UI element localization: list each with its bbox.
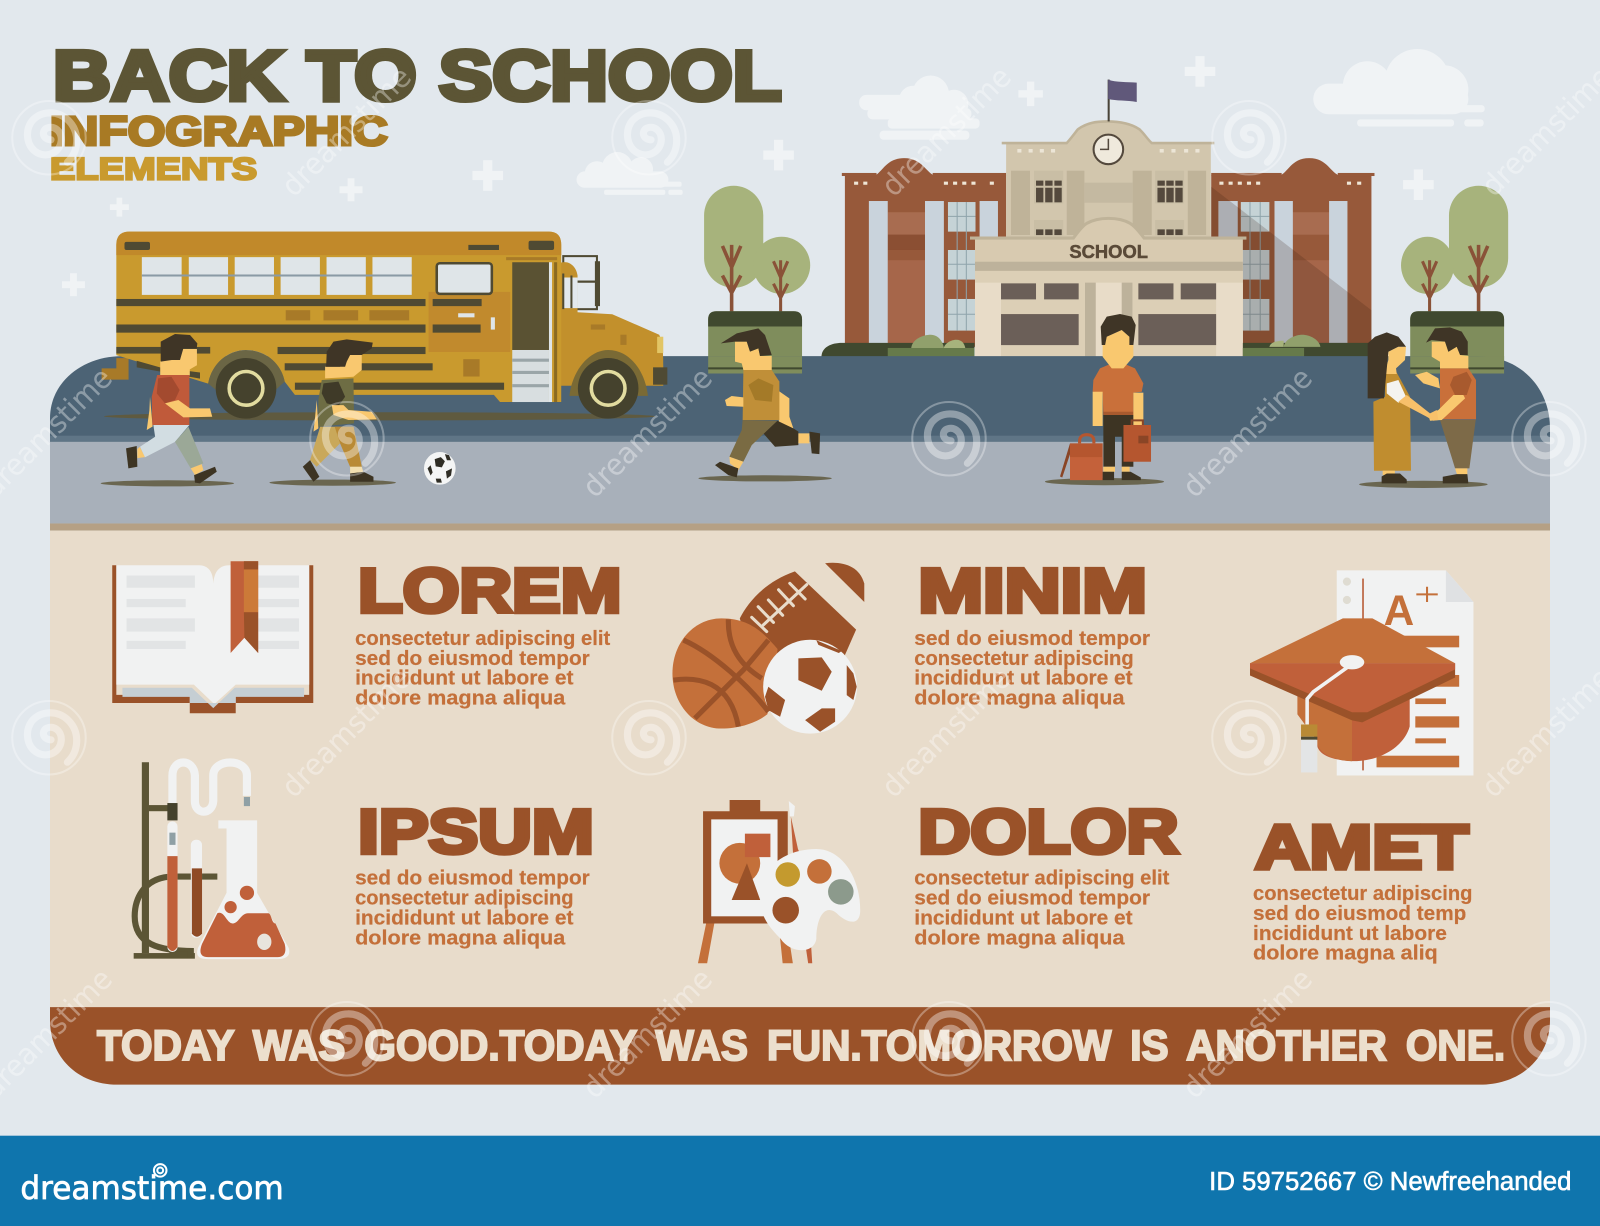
text block: minim: consectetur adipiscing: [914, 648, 1134, 670]
bookmark: [231, 561, 258, 653]
left brick wing: [842, 158, 1006, 347]
woman: [1368, 332, 1411, 483]
woman's arm: [1398, 395, 1438, 421]
watermark text: dreamstime: [875, 60, 1018, 203]
brush: [791, 816, 812, 963]
basketball: [672, 618, 778, 729]
trees and planter right: [1401, 186, 1508, 373]
title: BACK TO SCHOOL: [53, 36, 782, 115]
cloud right: [1313, 49, 1485, 127]
test tubes: [167, 821, 202, 952]
sky decorations: plus marks: [62, 56, 1434, 296]
road and sidewalk panel: [50, 356, 1550, 531]
text block: ipsum: consectetur adipiscing: [355, 888, 573, 910]
watermark text: dreamstime: [576, 361, 719, 504]
student standing with bags: [1060, 314, 1151, 480]
right brick wing: [1211, 158, 1374, 347]
text block: minim: sed do eiusmod tempor: [914, 628, 1150, 650]
clock: [1094, 135, 1123, 164]
windows: [142, 257, 412, 295]
content panel background: [50, 531, 1550, 1007]
watermark text: dreamstime: [1176, 962, 1319, 1105]
soccer ball: [763, 640, 857, 734]
stand: [134, 762, 217, 959]
text block: minim: dolore magna aliqua: [914, 688, 1126, 710]
text block: lorem: LOREM: [358, 557, 621, 626]
text block: dolor: incididunt ut labore et: [914, 907, 1133, 929]
door and steps: [506, 257, 557, 260]
front entrance building: SCHOOL: [1069, 241, 1148, 262]
text block: lorem: [355, 557, 621, 710]
footer bar: ID 59752667 © Newfreehanded: [1209, 1168, 1571, 1196]
football: [740, 563, 864, 694]
watermark text: dreamstime: [275, 60, 418, 203]
cloud left: [577, 152, 683, 195]
text block: minim: incididunt ut labore et: [914, 668, 1133, 690]
soccer ball on road: [424, 452, 456, 485]
text block: lorem: sed do eiusmod tempor: [355, 648, 590, 670]
banner with slogan: TODAY WAS GOOD.TODAY WAS FUN.TOMORROW IS ANOTHER ONE.: [97, 1022, 1505, 1070]
text block: ipsum: sed do eiusmod tempor: [355, 868, 590, 890]
icon: sports balls: [672, 563, 864, 734]
text block: ipsum: incididunt ut labore et: [355, 907, 574, 929]
hand bag: [1123, 420, 1151, 462]
flag: [1108, 80, 1137, 121]
text block: dolor: consectetur adipiscing elit: [914, 868, 1170, 890]
ground shadows under figures: [101, 475, 1488, 488]
text block: amet: consectetur adipiscing: [1253, 883, 1472, 905]
hood and cab: [559, 262, 663, 386]
icon: easel and palette: [698, 800, 860, 963]
wheels: [208, 350, 648, 419]
legs: [1103, 415, 1133, 467]
rear bumper: [102, 358, 129, 380]
cap: [1250, 618, 1455, 772]
text block: lorem: incididunt ut labore et: [355, 668, 574, 690]
footer bar: dreamstime.com: [20, 1171, 284, 1207]
watermark text: dreamstime: [275, 661, 418, 804]
text block: lorem: consectetur adipiscing elit: [355, 628, 611, 650]
paper: A: [1384, 587, 1414, 635]
trees and planter left: [704, 186, 810, 373]
text block: amet: dolore magna aliq: [1253, 943, 1438, 965]
watermark text: dreamstime: [576, 962, 719, 1105]
footer bar: [0, 1136, 1600, 1226]
shirt: [1093, 363, 1143, 415]
flask: [197, 820, 289, 959]
watermark swirls: [12, 101, 1586, 1075]
text block: ipsum: dolore magna aliqua: [355, 927, 566, 949]
front entrance building: [970, 218, 1246, 357]
paper: [1337, 570, 1473, 775]
text block: amet: sed do eiusmod temp: [1253, 903, 1466, 925]
title: ELEMENTS: [50, 151, 257, 187]
text block: minim: MINIM: [918, 557, 1147, 626]
cloud middle: [859, 76, 980, 140]
head: [1103, 330, 1133, 368]
text block: dolor: dolore magna aliqua: [914, 927, 1126, 949]
central tower: [1002, 121, 1214, 245]
text block: amet: AMET: [1255, 813, 1468, 882]
easel: [698, 800, 793, 963]
arms: [1093, 392, 1103, 426]
mirror frames: [563, 256, 597, 309]
text block: dolor: [914, 798, 1179, 949]
watermark text: dreamstime: [1176, 361, 1319, 504]
title: INFOGRAPHIC: [50, 108, 388, 154]
title: [50, 36, 782, 187]
text block: ipsum: [355, 798, 594, 949]
text block: dolor: sed do eiusmod tempor: [914, 888, 1150, 910]
text block: dolor: DOLOR: [918, 798, 1179, 867]
text block: lorem: dolore magna aliqua: [355, 688, 566, 710]
text block: amet: [1253, 813, 1472, 965]
hedges and bushes: [821, 335, 1371, 357]
coil tube: [172, 762, 247, 812]
backpack: [1060, 435, 1103, 480]
palette: [760, 849, 860, 950]
icon: graduation cap and graded paper: [1250, 570, 1473, 775]
child running, red shirt: [126, 334, 217, 483]
watermark text: dreamstime: [875, 661, 1018, 804]
stripes: [116, 241, 554, 390]
body: [116, 232, 561, 402]
icon: open book: [112, 561, 313, 713]
child running, ochre shirt: [715, 328, 820, 477]
child running, green shirt: [303, 339, 377, 482]
banner with slogan: [50, 1007, 1550, 1085]
text block: minim: [914, 557, 1150, 710]
planter fronts over road: [708, 356, 1504, 373]
school bus: [102, 232, 667, 420]
man: [1415, 327, 1476, 483]
text block: ipsum: IPSUM: [358, 798, 594, 867]
couple greeting: [1368, 327, 1476, 483]
icon: laboratory glassware: [134, 762, 289, 959]
school building: [821, 80, 1374, 357]
text block: amet: incididunt ut labore: [1253, 923, 1447, 945]
